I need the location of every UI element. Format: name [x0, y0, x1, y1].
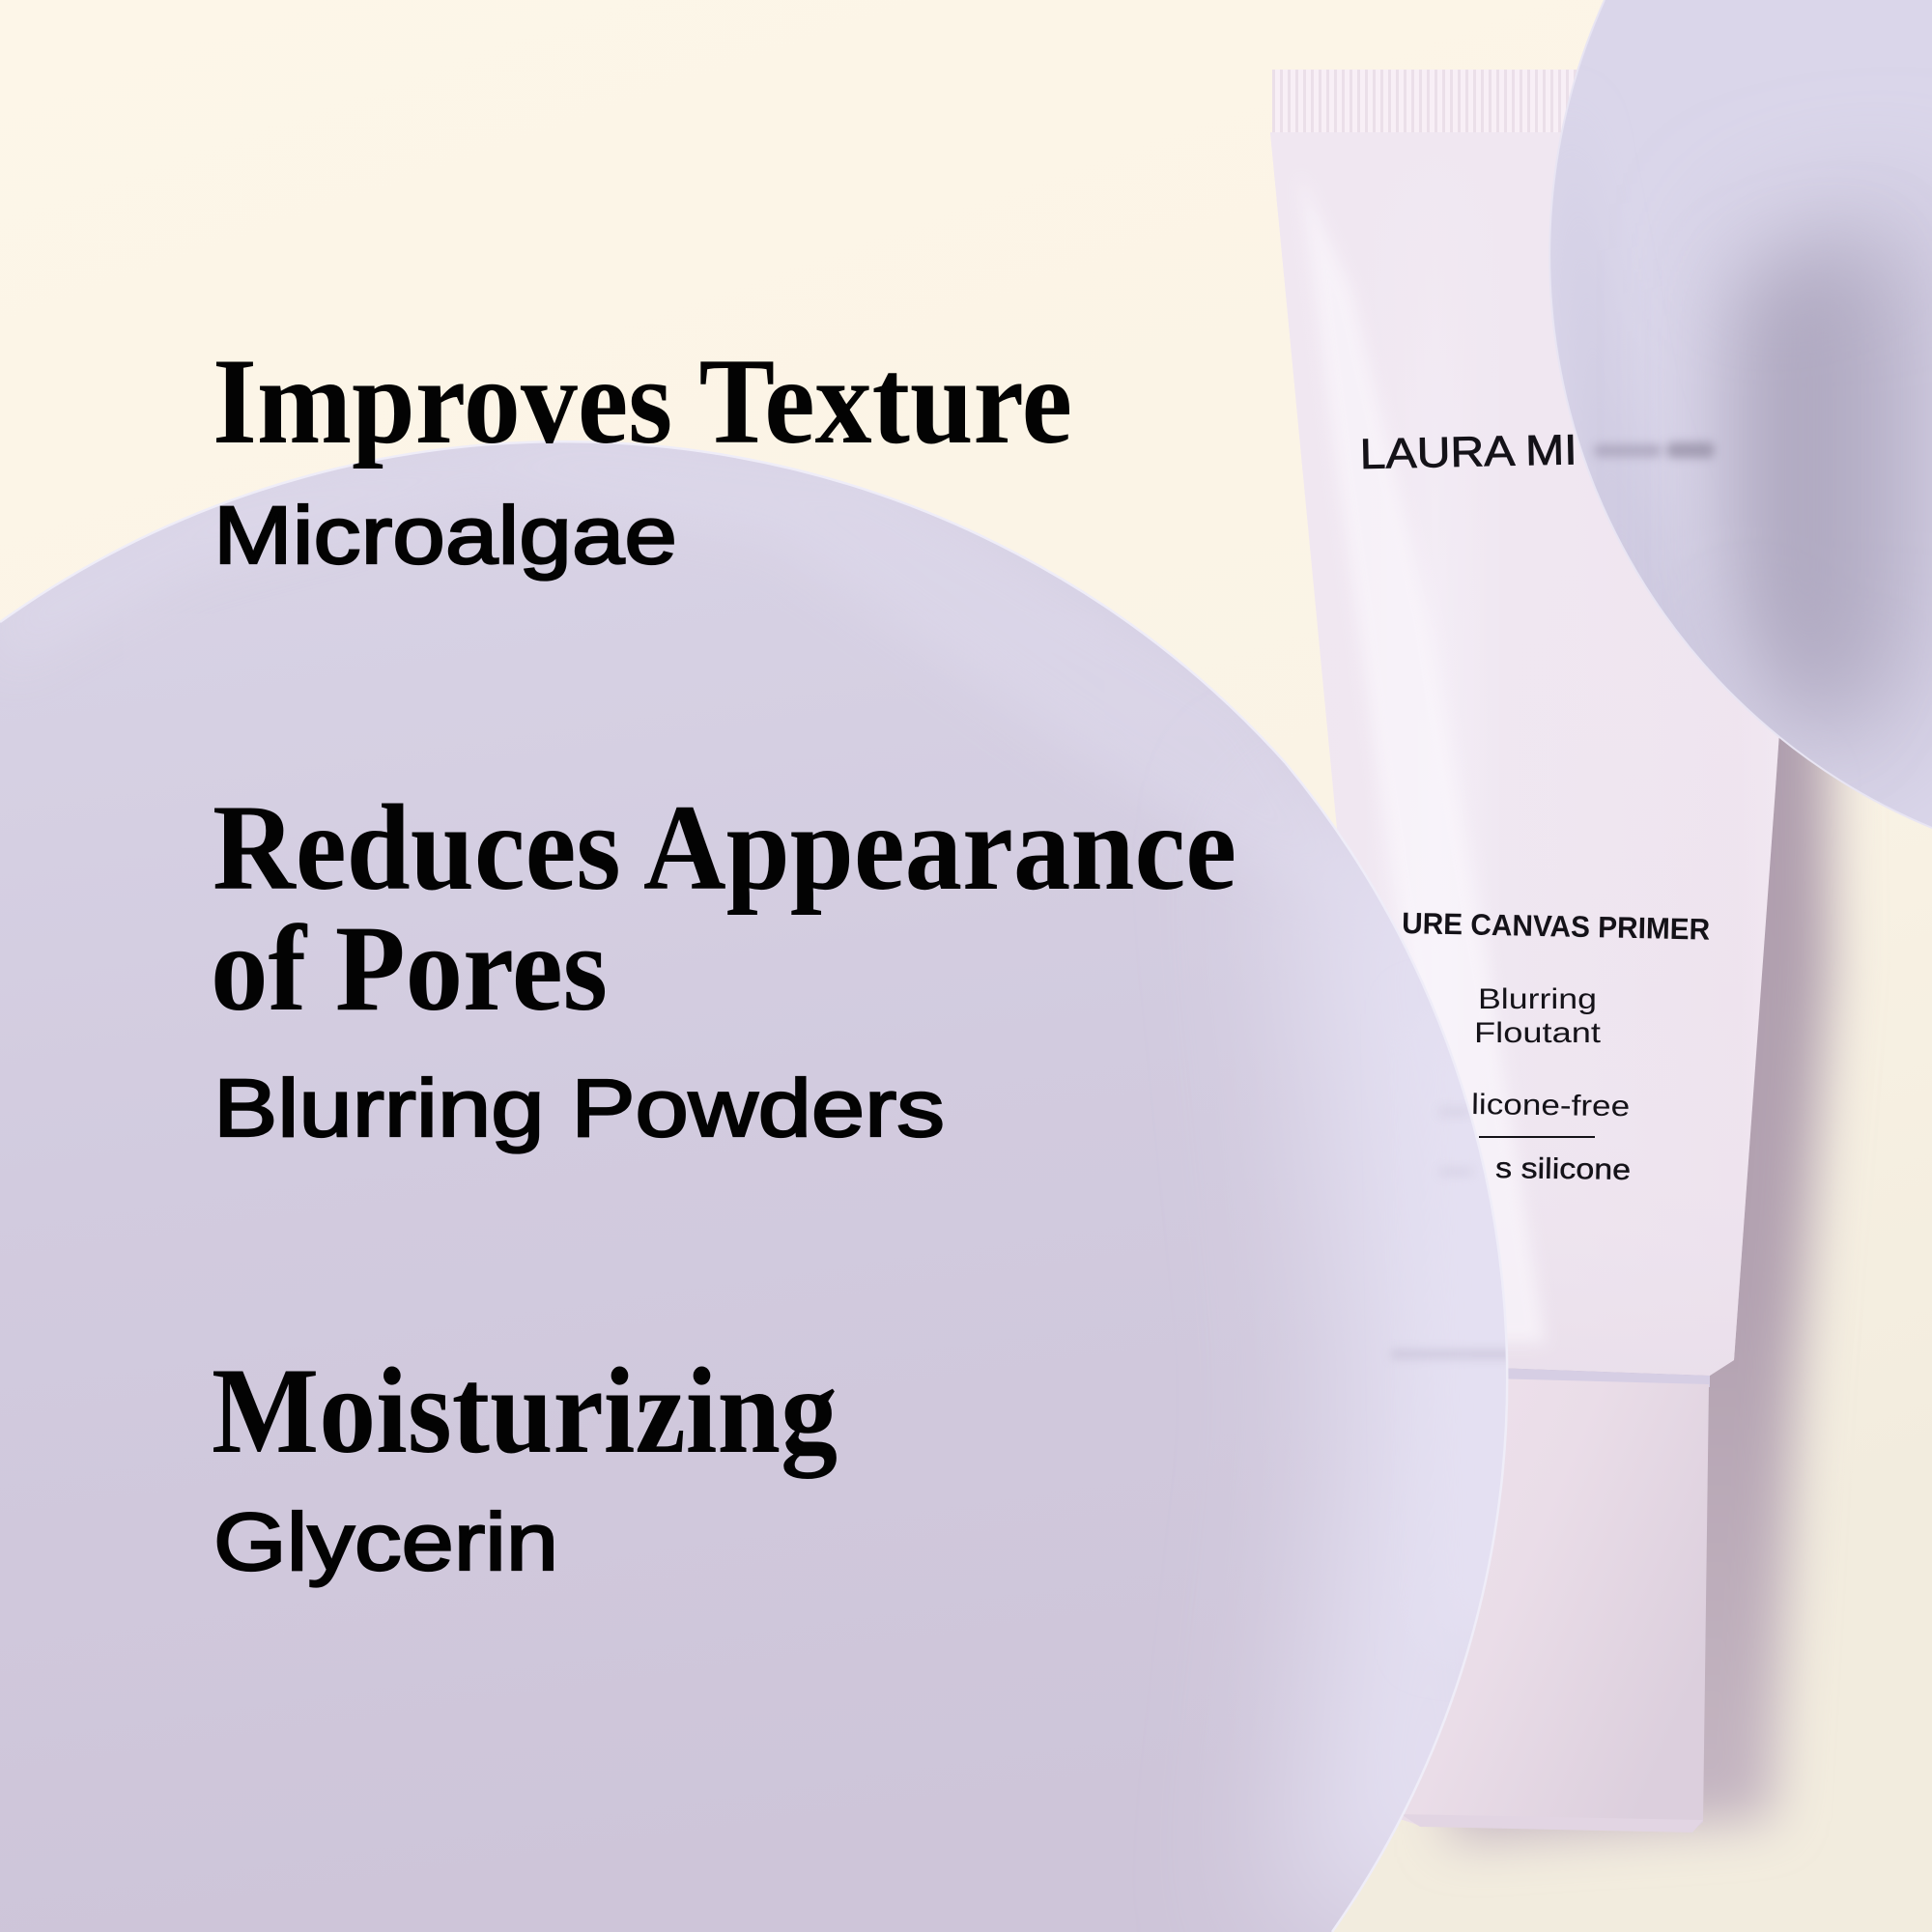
product: primer tube	[1270, 70, 1821, 1833]
product claim: silicone-free: licone-free	[1471, 1089, 1630, 1122]
brand text: LAURA MI	[1359, 426, 1577, 478]
blurred brand text	[1594, 442, 1715, 458]
heading: improves texture: Improves Texture	[213, 334, 1072, 469]
product descriptor: blurring: Blurring	[1478, 983, 1597, 1015]
ingredient: blurring powders: Blurring Powders	[213, 1063, 945, 1153]
frosted disc: top right	[1536, 0, 1932, 850]
frosted disc: large left	[0, 425, 1546, 1932]
tube cap	[1381, 1376, 1709, 1832]
benefit 1	[213, 334, 1072, 581]
light rim glow	[0, 425, 1401, 918]
product name text: URE CANVAS PRIMER	[1402, 906, 1711, 947]
heading: reduces appearance of pores: of Pores	[211, 901, 608, 1037]
product descriptor: floutant: Floutant	[1474, 1017, 1602, 1049]
cap bottom lip	[1401, 1814, 1703, 1833]
heading: moisturizing: Moisturizing	[212, 1344, 838, 1479]
heading: reduces appearance of pores: Reduces Appearance	[213, 781, 1236, 916]
tube seen through disc	[1269, 850, 1471, 1930]
product claim: sans silicone: s silicone	[1495, 1152, 1631, 1186]
tube body	[1270, 132, 1821, 1376]
benefit 2	[211, 781, 1236, 1153]
ingredient: glycerin: Glycerin	[213, 1496, 558, 1587]
tube crimp	[1272, 70, 1813, 133]
tube highlight	[1299, 174, 1546, 1343]
blurred label marks	[1439, 1107, 1472, 1177]
tube shadow	[1449, 483, 1831, 1840]
ingredient: microalgae: Microalgae	[213, 490, 677, 581]
blurred tube end	[1391, 1350, 1517, 1359]
claim divider	[1479, 1136, 1595, 1138]
benefit 3	[212, 1344, 838, 1587]
cap collar	[1388, 1364, 1710, 1387]
heading: reduces appearance of pores	[211, 781, 1236, 1037]
